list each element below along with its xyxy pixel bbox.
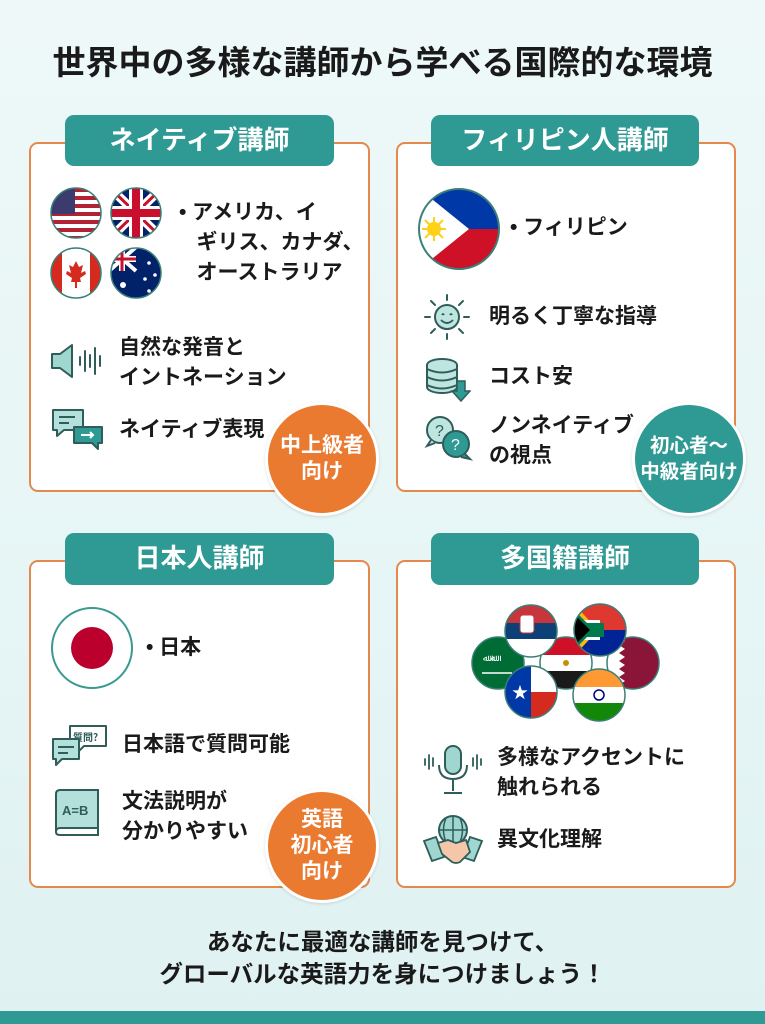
text: grammar explanation: 文法説明が [122, 790, 227, 813]
text: non-native perspective: ノンネイティブ [489, 414, 634, 437]
heading: multinational: 多国籍講師 [500, 543, 630, 573]
heading: japanese: 日本人講師 [134, 543, 264, 573]
icon: microphone [424, 745, 482, 794]
icon: chat bubbles [52, 409, 103, 450]
icon: flag cluster: ★ [512, 685, 528, 702]
badge: english beginners [265, 789, 379, 903]
icon: question speech: 質問? [73, 729, 98, 744]
text: countries: ギリス、カナダ、 [196, 231, 363, 254]
text: japan: • 日本 [146, 636, 201, 659]
text: countries [179, 201, 363, 284]
text: native expressions: ネイティブ表現 [119, 418, 264, 441]
icon: speaker [51, 344, 101, 378]
badge: upper-intermediate: 中上級者 [280, 434, 364, 457]
text: non-native perspective: の視点 [489, 444, 552, 467]
text: pronunciation: 自然な発音と [119, 336, 245, 359]
text: philippines: • フィリピン [510, 216, 628, 239]
icon: book A=B: A=B [62, 803, 88, 818]
text: grammar explanation [122, 790, 248, 843]
text: countries: オーストラリア [196, 261, 342, 284]
icon: flags US UK CA AU [50, 187, 162, 299]
icon: flag cluster [471, 603, 660, 722]
badge: english beginners: 英語 [301, 808, 343, 831]
icon: question bubbles: ? [451, 437, 460, 454]
text: cross-cultural: 異文化理解 [497, 828, 602, 851]
heading: japanese [65, 533, 334, 585]
footer message: グローバルな英語力を身につけましょう！ [159, 961, 606, 987]
icon: flag cluster: ﷲ ﷲ [483, 653, 502, 663]
badge: beginner to intermediate: 初心者～ [650, 435, 728, 457]
text: pronunciation: イントネーション [119, 366, 287, 389]
icon: book A=B [55, 789, 99, 836]
text: accents: 多様なアクセントに [497, 746, 685, 769]
icon: sun [424, 294, 470, 340]
panel box [396, 560, 736, 888]
panel: japanese [29, 533, 380, 905]
icon: flag japan [51, 607, 133, 689]
footer message: あなたに最適な講師を見つけて、 [207, 929, 558, 955]
panel box [29, 560, 370, 888]
text: grammar explanation: 分かりやすい [122, 820, 248, 843]
icon: question speech [52, 725, 107, 766]
bottom bar [0, 1011, 765, 1024]
panel box [396, 142, 736, 492]
text: bright teaching: 明るく丁寧な指導 [489, 305, 657, 328]
badge: upper-intermediate: 向け [301, 460, 343, 483]
icon: question bubbles [424, 416, 473, 461]
icon: flag philippines [418, 188, 500, 270]
badge: beginner to intermediate [632, 402, 746, 516]
heading: native [65, 115, 334, 166]
icon: question bubbles: ? [435, 423, 444, 440]
text: pronunciation [119, 336, 287, 389]
icon: globe handshake [422, 815, 484, 864]
badge: english beginners: 向け [301, 860, 343, 883]
text: ask in japanese: 日本語で質問可能 [122, 733, 290, 756]
panel: native [29, 115, 380, 518]
text: countries: • アメリカ、イ [179, 201, 317, 224]
badge: english beginners: 初心者 [290, 834, 354, 857]
text: low cost: コスト安 [489, 365, 573, 388]
heading: filipino [431, 115, 699, 166]
heading: filipino: フィリピン人講師 [461, 125, 669, 155]
badge: beginner to intermediate: 中級者向け [640, 461, 738, 483]
text: non-native perspective [489, 414, 634, 467]
heading: multinational [431, 533, 699, 585]
icon: coins [426, 358, 471, 402]
badge: upper-intermediate [265, 402, 379, 516]
panel: multinational [396, 533, 736, 888]
footer message [159, 929, 606, 987]
panel: filipino [396, 115, 747, 518]
text: accents: 触れられる [497, 776, 602, 799]
heading: native: ネイティブ講師 [110, 125, 289, 155]
panel box [29, 142, 370, 492]
text: accents [497, 746, 685, 799]
title: 世界中の多様な講師から学べる国際的な環境 [52, 44, 712, 81]
